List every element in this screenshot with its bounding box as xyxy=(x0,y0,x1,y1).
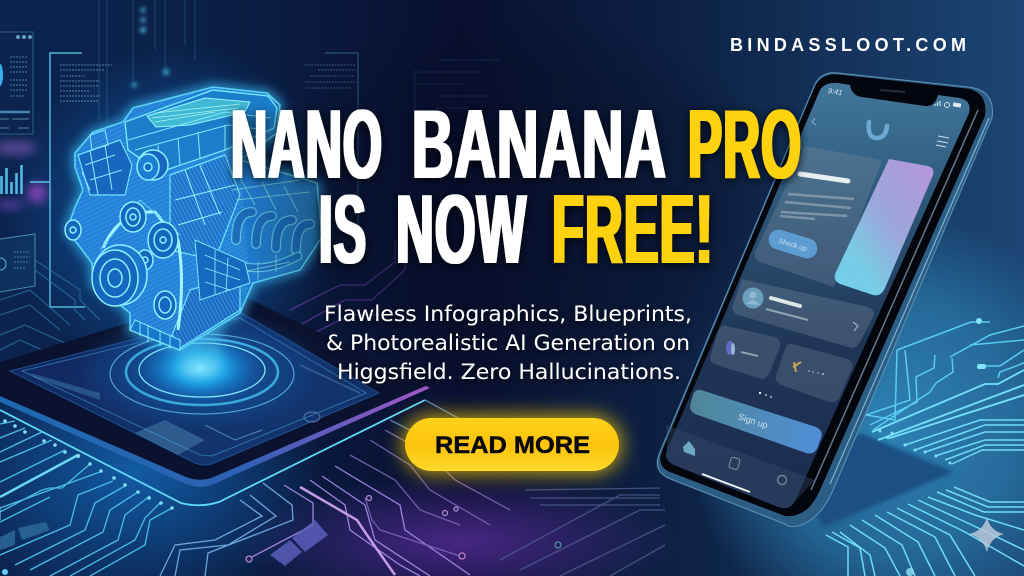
pager dots xyxy=(759,392,772,398)
engine block xyxy=(67,87,322,350)
phone xyxy=(657,73,992,527)
sign up button: Sign up xyxy=(737,412,769,430)
phone body xyxy=(657,73,992,527)
tablet body xyxy=(0,293,430,487)
left holographic data panels xyxy=(0,32,47,292)
lower block xyxy=(172,275,240,348)
app logo xyxy=(869,122,887,138)
icon: sparkle xyxy=(969,517,1004,552)
top card xyxy=(755,146,933,295)
headline line 1: PRO xyxy=(688,89,802,199)
hologram projector rings xyxy=(75,308,325,432)
gradient panel xyxy=(835,159,933,295)
intake manifold runners xyxy=(228,212,310,268)
hologram engine xyxy=(65,87,322,350)
status bar: 9:41 xyxy=(827,86,843,97)
dark centre vignette behind text xyxy=(230,10,800,400)
small cards xyxy=(710,326,780,379)
subtitle: Higgsfield. Zero Hallucinations. xyxy=(337,360,681,384)
subtitle: Flawless Infographics, Blueprints, xyxy=(324,302,692,326)
read more button xyxy=(403,416,621,473)
subtitle: & Photorealistic AI Generation on xyxy=(326,331,690,355)
button: shock up: Shock up xyxy=(778,238,808,253)
phone screen xyxy=(666,83,970,508)
subtitle xyxy=(324,302,692,384)
profile card xyxy=(732,279,874,348)
blueprint frames and data text xyxy=(30,0,500,307)
status bar xyxy=(827,86,961,108)
headline line 1 xyxy=(231,89,802,199)
headline line 1: NANO xyxy=(231,89,383,199)
headline line 1: BANANA xyxy=(412,89,667,199)
circuit board lower left xyxy=(0,400,425,576)
circuit board lower centre xyxy=(160,400,665,576)
tablet screen xyxy=(10,312,379,465)
bottom nav xyxy=(666,425,815,508)
read more button: READ MORE xyxy=(435,432,590,459)
circuit traces upper left xyxy=(0,260,100,365)
headline line 2: IS xyxy=(319,174,367,284)
site name: BINDASSLOOT.COM xyxy=(730,35,966,55)
belt xyxy=(103,212,182,330)
button: shock up xyxy=(766,227,820,261)
pulleys xyxy=(65,150,178,319)
circuit traces upper middle xyxy=(290,240,405,335)
headline xyxy=(231,89,802,284)
headline line 2 xyxy=(319,174,714,284)
side block detail xyxy=(78,140,132,195)
headline line 2: FREE! xyxy=(552,174,714,284)
bright board border xyxy=(0,400,425,505)
circuit board right xyxy=(826,318,1024,576)
headline line 2: NOW xyxy=(396,174,527,284)
tablet xyxy=(0,291,430,487)
valve cover xyxy=(125,90,277,172)
sign up button xyxy=(690,390,822,454)
